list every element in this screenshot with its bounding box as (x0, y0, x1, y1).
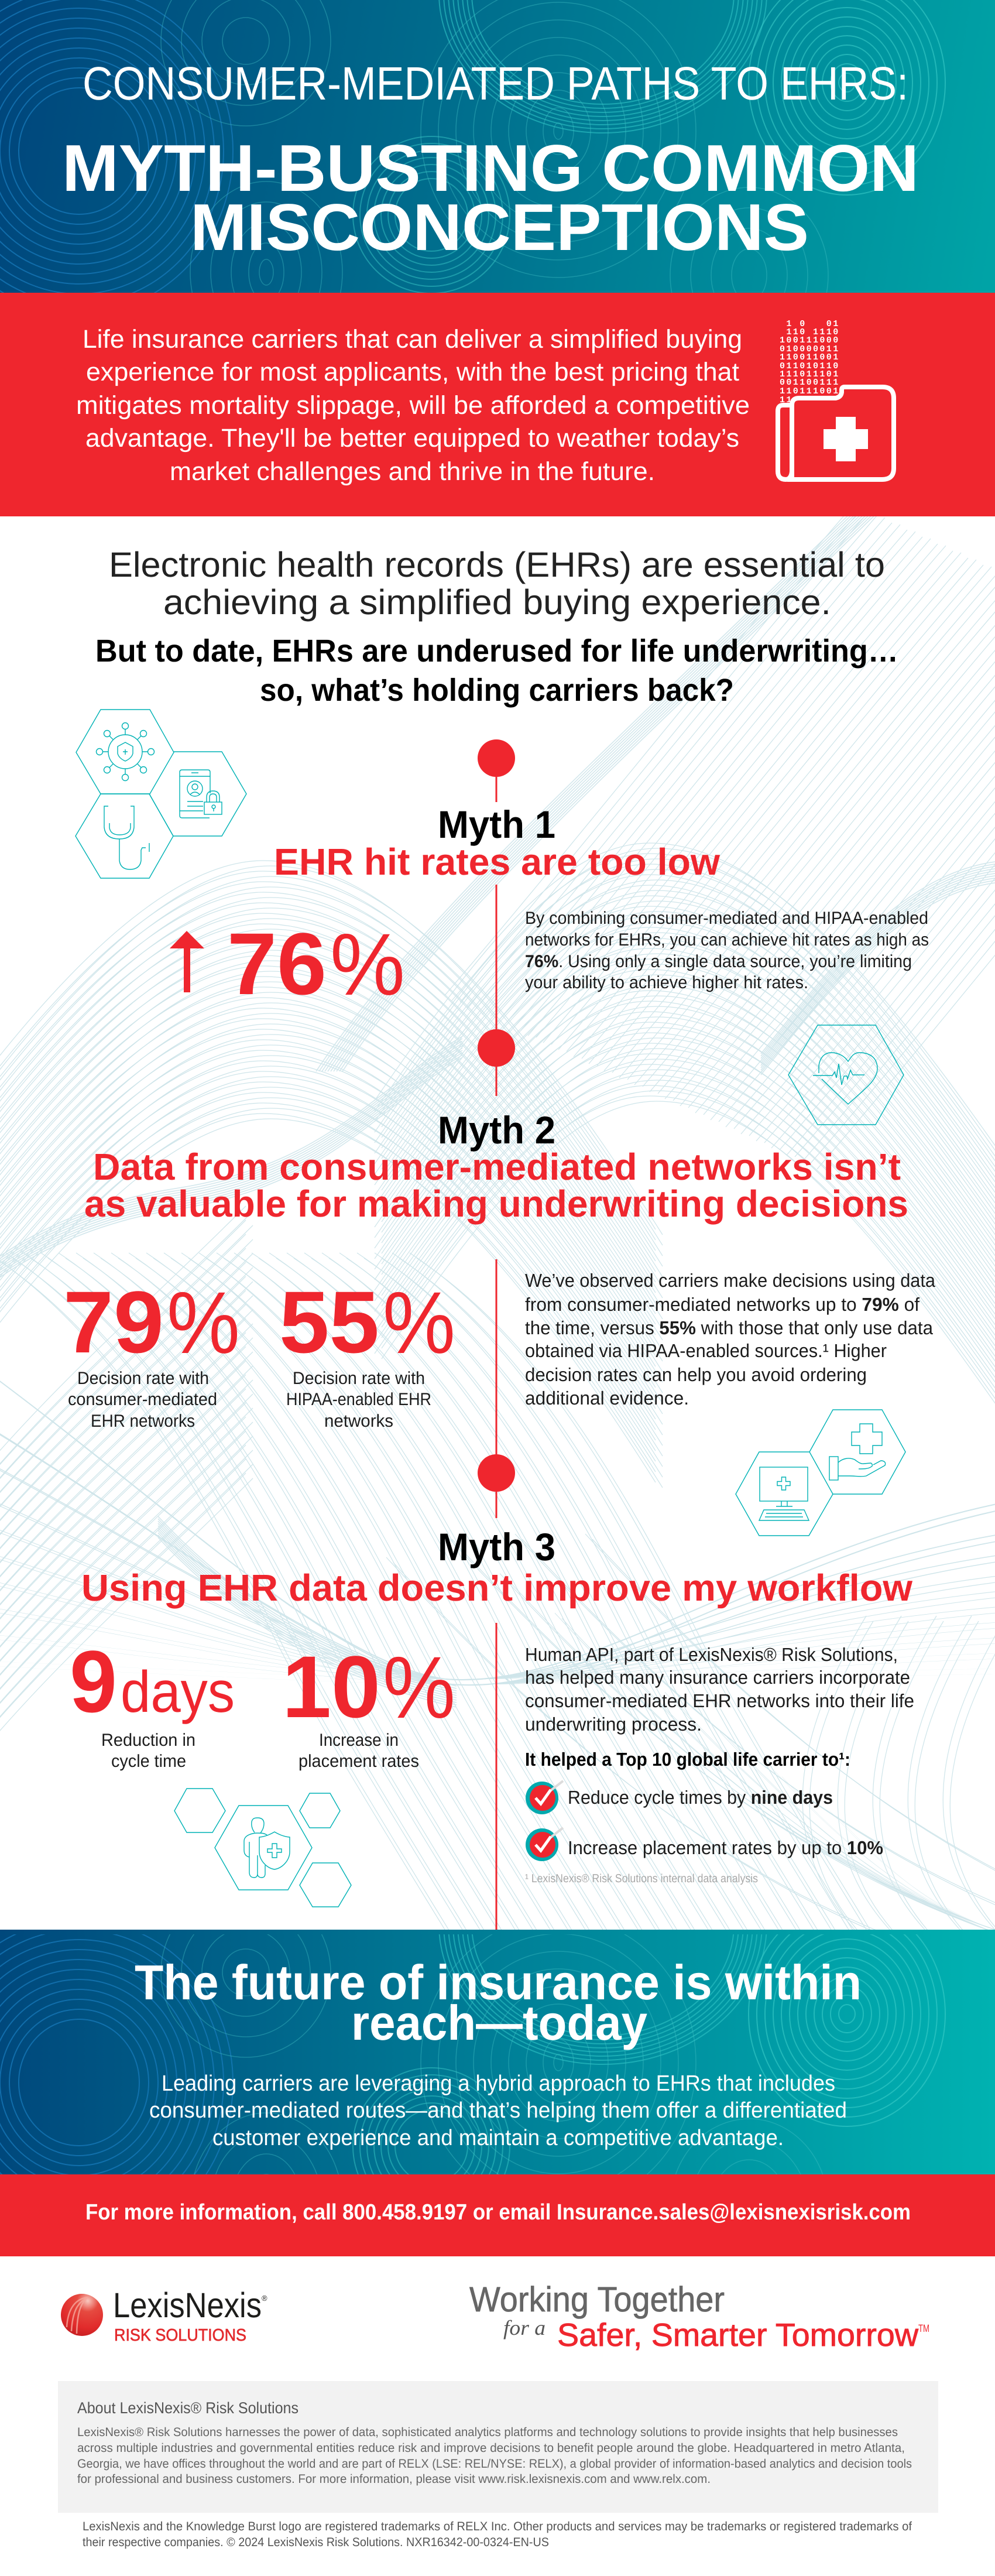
panel: myth 1 (170, 803, 929, 1125)
myth 3 heading: Myth 3 (438, 1525, 555, 1568)
myth 3 heading: Using EHR data doesn’t improve my workflow (81, 1567, 912, 1609)
icon: heart with pulse hexagon (788, 1025, 904, 1125)
icon: medical folder with binary data: 1 0 01 (780, 319, 840, 329)
subheading: underused question: so, what’s holding carriers back? (260, 673, 734, 708)
stat: 79 percent: Decision rate with (77, 1369, 209, 1388)
about heading: About LexisNexis® Risk Solutions (77, 2399, 298, 2417)
about text: across multiple industries and governmental entities reduce risk and improve decisions to benefit people around the globe. Headquartered in metro Atlanta, (77, 2441, 905, 2455)
stat: 79 percent: EHR networks (91, 1412, 195, 1431)
main title: MISCONCEPTIONS (190, 190, 809, 264)
stat: 76 percent: % (330, 915, 405, 1013)
subheading: underused question: But to date, EHRs are underused for life underwriting… (95, 633, 898, 669)
myth 1 body text: your ability to achieve higher hit rates. (525, 973, 808, 992)
logo: LexisNexis Risk Solutions: LexisNexis (113, 2286, 262, 2325)
myth 3 body text: consumer-mediated EHR networks into their life (525, 1690, 914, 1711)
myth 2 body text (525, 1270, 935, 1409)
myth 2 heading: Data from consumer-mediated networks isn’t (93, 1146, 901, 1188)
stat: 79 percent: consumer-mediated (68, 1390, 217, 1409)
intro paragraph: market challenges and thrive in the future. (170, 457, 655, 486)
intro paragraph: advantage. They'll be better equipped to weather today’s (85, 424, 739, 453)
icon: medical folder with binary data: 001100111 (780, 378, 840, 388)
icon: up arrow (170, 931, 204, 992)
myth 2 body text: from consumer-mediated networks up to 79% of (525, 1294, 919, 1315)
stat: 79 percent: 79 (63, 1273, 164, 1371)
tagline: TM (918, 2322, 929, 2334)
myth 2 body text: additional evidence. (525, 1388, 689, 1409)
myth 3 body text (525, 1644, 914, 1735)
stat: 10 percent: placement rates (298, 1752, 419, 1771)
myth 1 body text: By combining consumer-mediated and HIPAA-enabled (525, 909, 928, 928)
stat: 55 percent: % (383, 1273, 455, 1372)
myth 2 body text: obtained via HIPAA-enabled sources.¹ Higher (525, 1340, 887, 1361)
about text: Georgia, we have offices throughout the world and are part of RELX (LSE: REL/NYSE: RELX), a global provider of information-based analytics and decision tools (77, 2457, 912, 2471)
stat: 76 percent (227, 914, 405, 1013)
myth 2 body text: We’ve observed carriers make decisions using data (525, 1270, 935, 1291)
icon: medical folder with binary data: 110111001 (780, 386, 840, 396)
stat: 76 percent: 76 (227, 914, 327, 1013)
stat: 9 days: days (121, 1659, 235, 1725)
intro paragraph (76, 325, 750, 486)
checklist item: nine days: Reduce cycle times by nine days (568, 1787, 833, 1808)
panel: red intro band (0, 293, 995, 516)
icon: medical folder with binary data: 110 1110 (780, 327, 840, 337)
about text: LexisNexis® Risk Solutions harnesses the power of data, sophisticated analytics platforms and technology solutions to provide insights that help businesses (77, 2426, 898, 2439)
white background with guilloche line pattern (0, 503, 995, 1958)
icon group: security, phone and stethoscope hexagons (76, 710, 246, 878)
stat: 10 percent: 10 (282, 1638, 380, 1736)
myth 2 body text: the time, versus 55% with those that only use data (525, 1317, 933, 1338)
stat: 79 percent: % (167, 1273, 240, 1372)
myth 2 body text: decision rates can help you avoid ordering (525, 1364, 867, 1385)
icon: medical folder with binary data: 11 (780, 395, 793, 405)
stat: 10 percent: % (383, 1638, 455, 1736)
stat: 55 percent (279, 1273, 455, 1431)
stat: 55 percent: HIPAA-enabled EHR (286, 1390, 431, 1409)
checklist item: ten percent (526, 1828, 883, 1861)
header banner (0, 0, 995, 293)
legal text (83, 2520, 912, 2549)
icon: medical folder with binary data: 011010110 (780, 361, 840, 371)
intro paragraph: experience for most applicants, with the best pricing that (86, 358, 739, 386)
panel: contact band (0, 2174, 995, 2256)
tagline: Working Together (469, 2280, 725, 2319)
myth 1 heading (274, 803, 720, 883)
logo: LexisNexis Risk Solutions (61, 2286, 267, 2345)
icon: computer and caring hand hexagons (736, 1410, 905, 1536)
band paragraph (149, 2071, 847, 2150)
stat: 55 percent: networks (324, 1412, 393, 1431)
icon: medical folder with binary data: 010000011 (780, 344, 840, 354)
band heading (135, 1955, 862, 2050)
stat: 9 days: cycle time (111, 1752, 186, 1771)
icon: medical folder with binary data: 110011001 (780, 352, 840, 362)
myth 1 heading: Myth 1 (438, 803, 555, 846)
contact line: For more information, call 800.458.9197 or email Insurance.sales@lexisnexisrisk.com (85, 2200, 911, 2225)
myth 3 body text: has helped many insurance carriers incorporate (525, 1667, 910, 1688)
panel: about box (58, 2381, 938, 2513)
band paragraph: Leading carriers are leveraging a hybrid approach to EHRs that includes (162, 2071, 835, 2096)
myth 3 body text: underwriting process. (525, 1714, 702, 1735)
checklist item: ten percent: Increase placement rates by up to 10% (568, 1837, 883, 1858)
stat: 9 days (70, 1632, 235, 1771)
panel: myth 2 (63, 1108, 935, 1536)
band heading: reach—today (351, 1995, 647, 2050)
icon: medical folder with binary data (778, 319, 894, 480)
subheading: underused question (95, 633, 898, 708)
subhead: top 10 carrier: It helped a Top 10 global life carrier to¹: (525, 1749, 850, 1770)
stat: 9 days: 9 (70, 1632, 117, 1731)
myth 1 heading: EHR hit rates are too low (274, 841, 720, 883)
band paragraph: consumer-mediated routes—and that’s helping them offer a differentiated (149, 2098, 847, 2123)
checklist item: nine days (526, 1781, 833, 1814)
about text: for professional and business customers. For more information, please visit www.risk.lexisnexis.com and www.relx.com. (77, 2472, 711, 2486)
legal text: their respective companies. © 2024 LexisNexis Risk Solutions. NXR16342-00-0324-EN-US (83, 2536, 549, 2549)
title line: consumer-mediated paths: CONSUMER-MEDIATED PATHS TO EHRS: (83, 57, 908, 109)
panel: myth 3 (70, 1525, 914, 1907)
panel: future of insurance band (0, 1930, 995, 2174)
tagline (469, 2280, 929, 2353)
tagline: for a (503, 2316, 545, 2339)
myth 3 heading (81, 1525, 912, 1609)
logo: LexisNexis Risk Solutions: RISK SOLUTIONS (114, 2326, 246, 2345)
tagline: Safer, Smarter Tomorrow (557, 2317, 918, 2353)
band heading: The future of insurance is within (135, 1955, 862, 2010)
band paragraph: customer experience and maintain a competitive advantage. (212, 2126, 784, 2150)
myth 2 heading: as valuable for making underwriting decisions (84, 1183, 908, 1225)
about text (77, 2426, 912, 2486)
logo: LexisNexis Risk Solutions: ® (262, 2294, 267, 2303)
timeline: vertical red connector with dots (478, 739, 515, 1930)
stat: 10 percent (282, 1638, 455, 1771)
icon: medical folder with binary data: 111011101 (780, 369, 840, 379)
icon: person with shield hexagons (174, 1789, 351, 1907)
myth 1 body text (525, 909, 929, 992)
stat: 55 percent: 55 (279, 1273, 379, 1371)
myth 3 body text: Human API, part of LexisNexis® Risk Solutions, (525, 1644, 898, 1665)
myth 1 body text: 76%. Using only a single data source, you’re limiting (525, 952, 912, 971)
footnote: ¹ LexisNexis® Risk Solutions internal data analysis (525, 1872, 758, 1885)
myth 2 heading: Myth 2 (438, 1108, 555, 1152)
main title: MYTH-BUSTING COMMON (62, 131, 919, 205)
heading: EHRs essential statement: achieving a simplified buying experience. (163, 583, 831, 622)
stat: 79 percent (63, 1273, 240, 1431)
legal text: LexisNexis and the Knowledge Burst logo are registered trademarks of RELX Inc. Other products and services may be trademarks or registered trademarks of (83, 2520, 912, 2533)
myth 2 heading (84, 1108, 908, 1225)
stat: 10 percent: Increase in (319, 1731, 399, 1750)
stat: 55 percent: Decision rate with (293, 1369, 425, 1388)
intro paragraph: mitigates mortality slippage, will be afforded a competitive (76, 391, 750, 420)
main title (62, 131, 919, 264)
icon: medical folder with binary data: 100111000 (780, 335, 840, 345)
intro paragraph: Life insurance carriers that can deliver a simplified buying (83, 325, 742, 354)
stat: 9 days: Reduction in (101, 1731, 195, 1750)
myth 1 body text: networks for EHRs, you can achieve hit rates as high as (525, 930, 929, 950)
heading: EHRs essential statement (109, 545, 885, 622)
heading: EHRs essential statement: Electronic health records (EHRs) are essential to (109, 545, 885, 584)
